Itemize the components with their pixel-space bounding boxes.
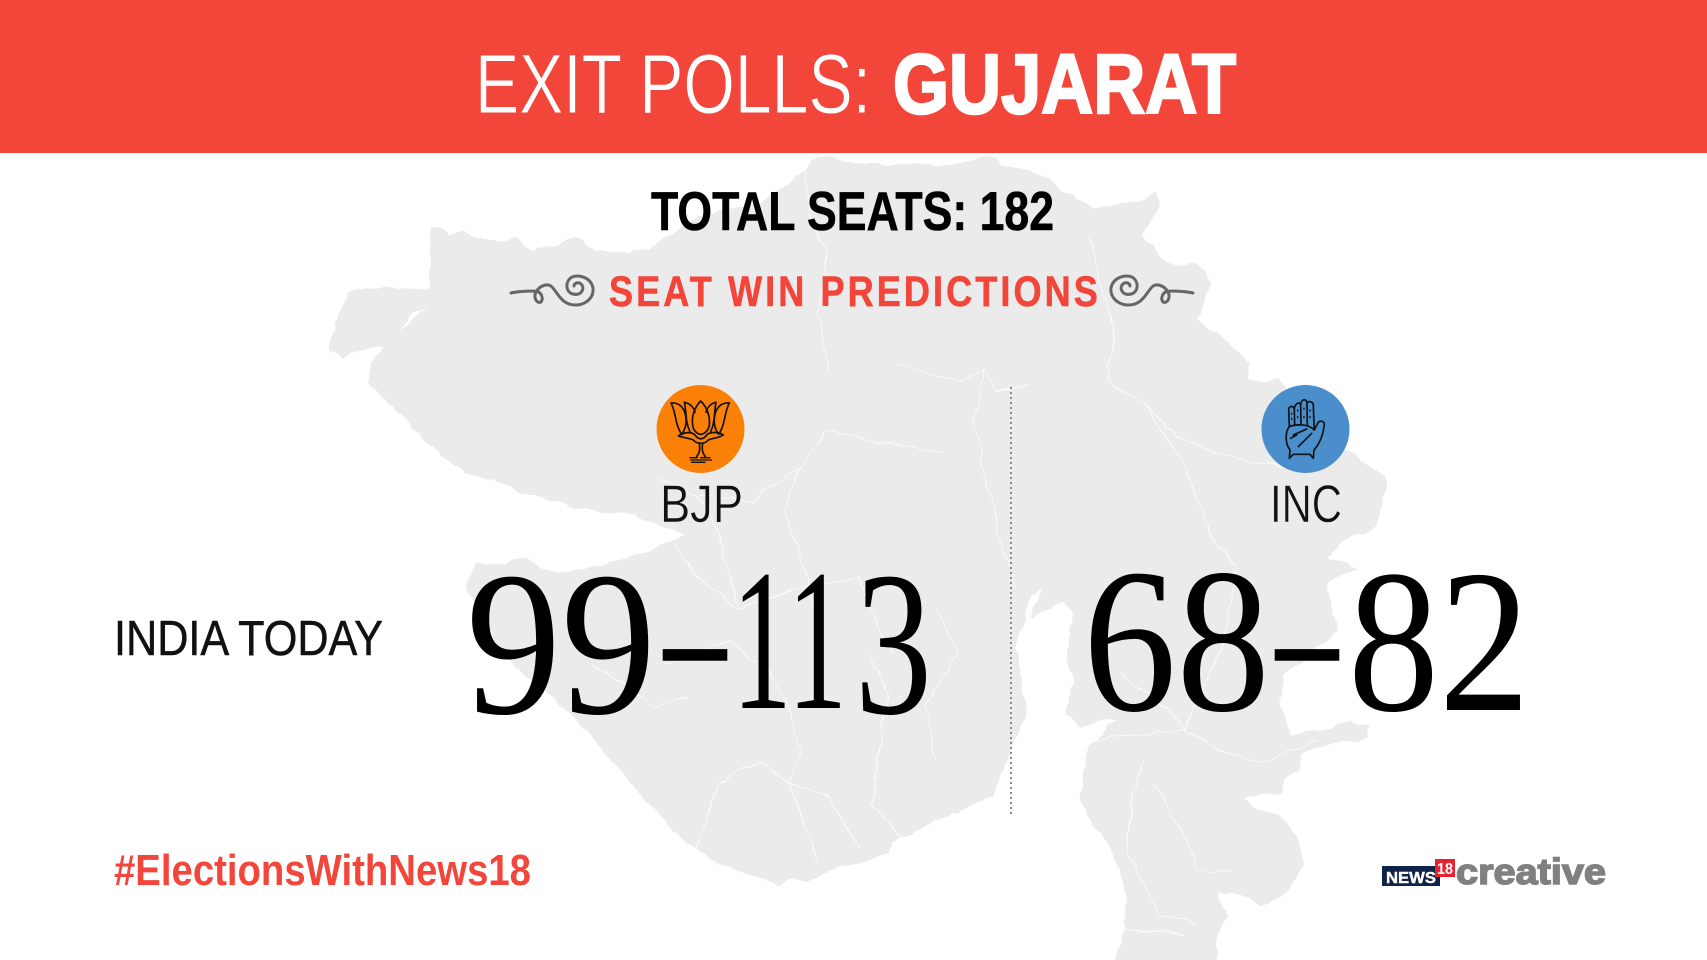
INC label: INC [1270,475,1342,534]
BJP label: BJP [660,475,743,534]
logo: News18 creative: NEWS [1386,870,1436,887]
pollster label: INDIA TODAY [114,612,383,666]
divider [1010,387,1012,815]
icon: right swirl [1111,276,1193,305]
INC seat prediction: 82 [1348,529,1530,755]
INC seat prediction [1083,522,1530,755]
subheading text: SEAT WIN PREDICTIONS [609,268,1098,316]
logo: News18 creative: creative [1456,851,1606,892]
BJP seat prediction [466,522,932,758]
INC seat prediction: 68 [1083,526,1270,755]
BJP seat prediction: 99 [466,529,656,758]
BJP seat prediction: – [663,522,727,746]
header banner [0,0,1707,153]
background map of Gujarat [328,155,1385,960]
logo: News18 creative: 18 [1437,861,1453,878]
hashtag: #ElectionsWithNews18 [114,846,531,895]
logo: News18 creative [1382,851,1606,892]
title [475,37,1236,131]
BJP seat prediction: 3 [855,529,932,758]
total seats heading: TOTAL SEATS: 182 [651,180,1054,242]
title: EXIT POLLS: [475,37,871,131]
seat win predictions subheading [511,268,1193,316]
icon: left swirl [511,276,593,305]
BJP seat prediction: 11 [732,528,847,752]
title: GUJARAT [893,37,1236,131]
INC seat prediction: – [1275,522,1339,746]
icon: BJP lotus [656,385,744,473]
icon: INC hand [1262,385,1350,473]
